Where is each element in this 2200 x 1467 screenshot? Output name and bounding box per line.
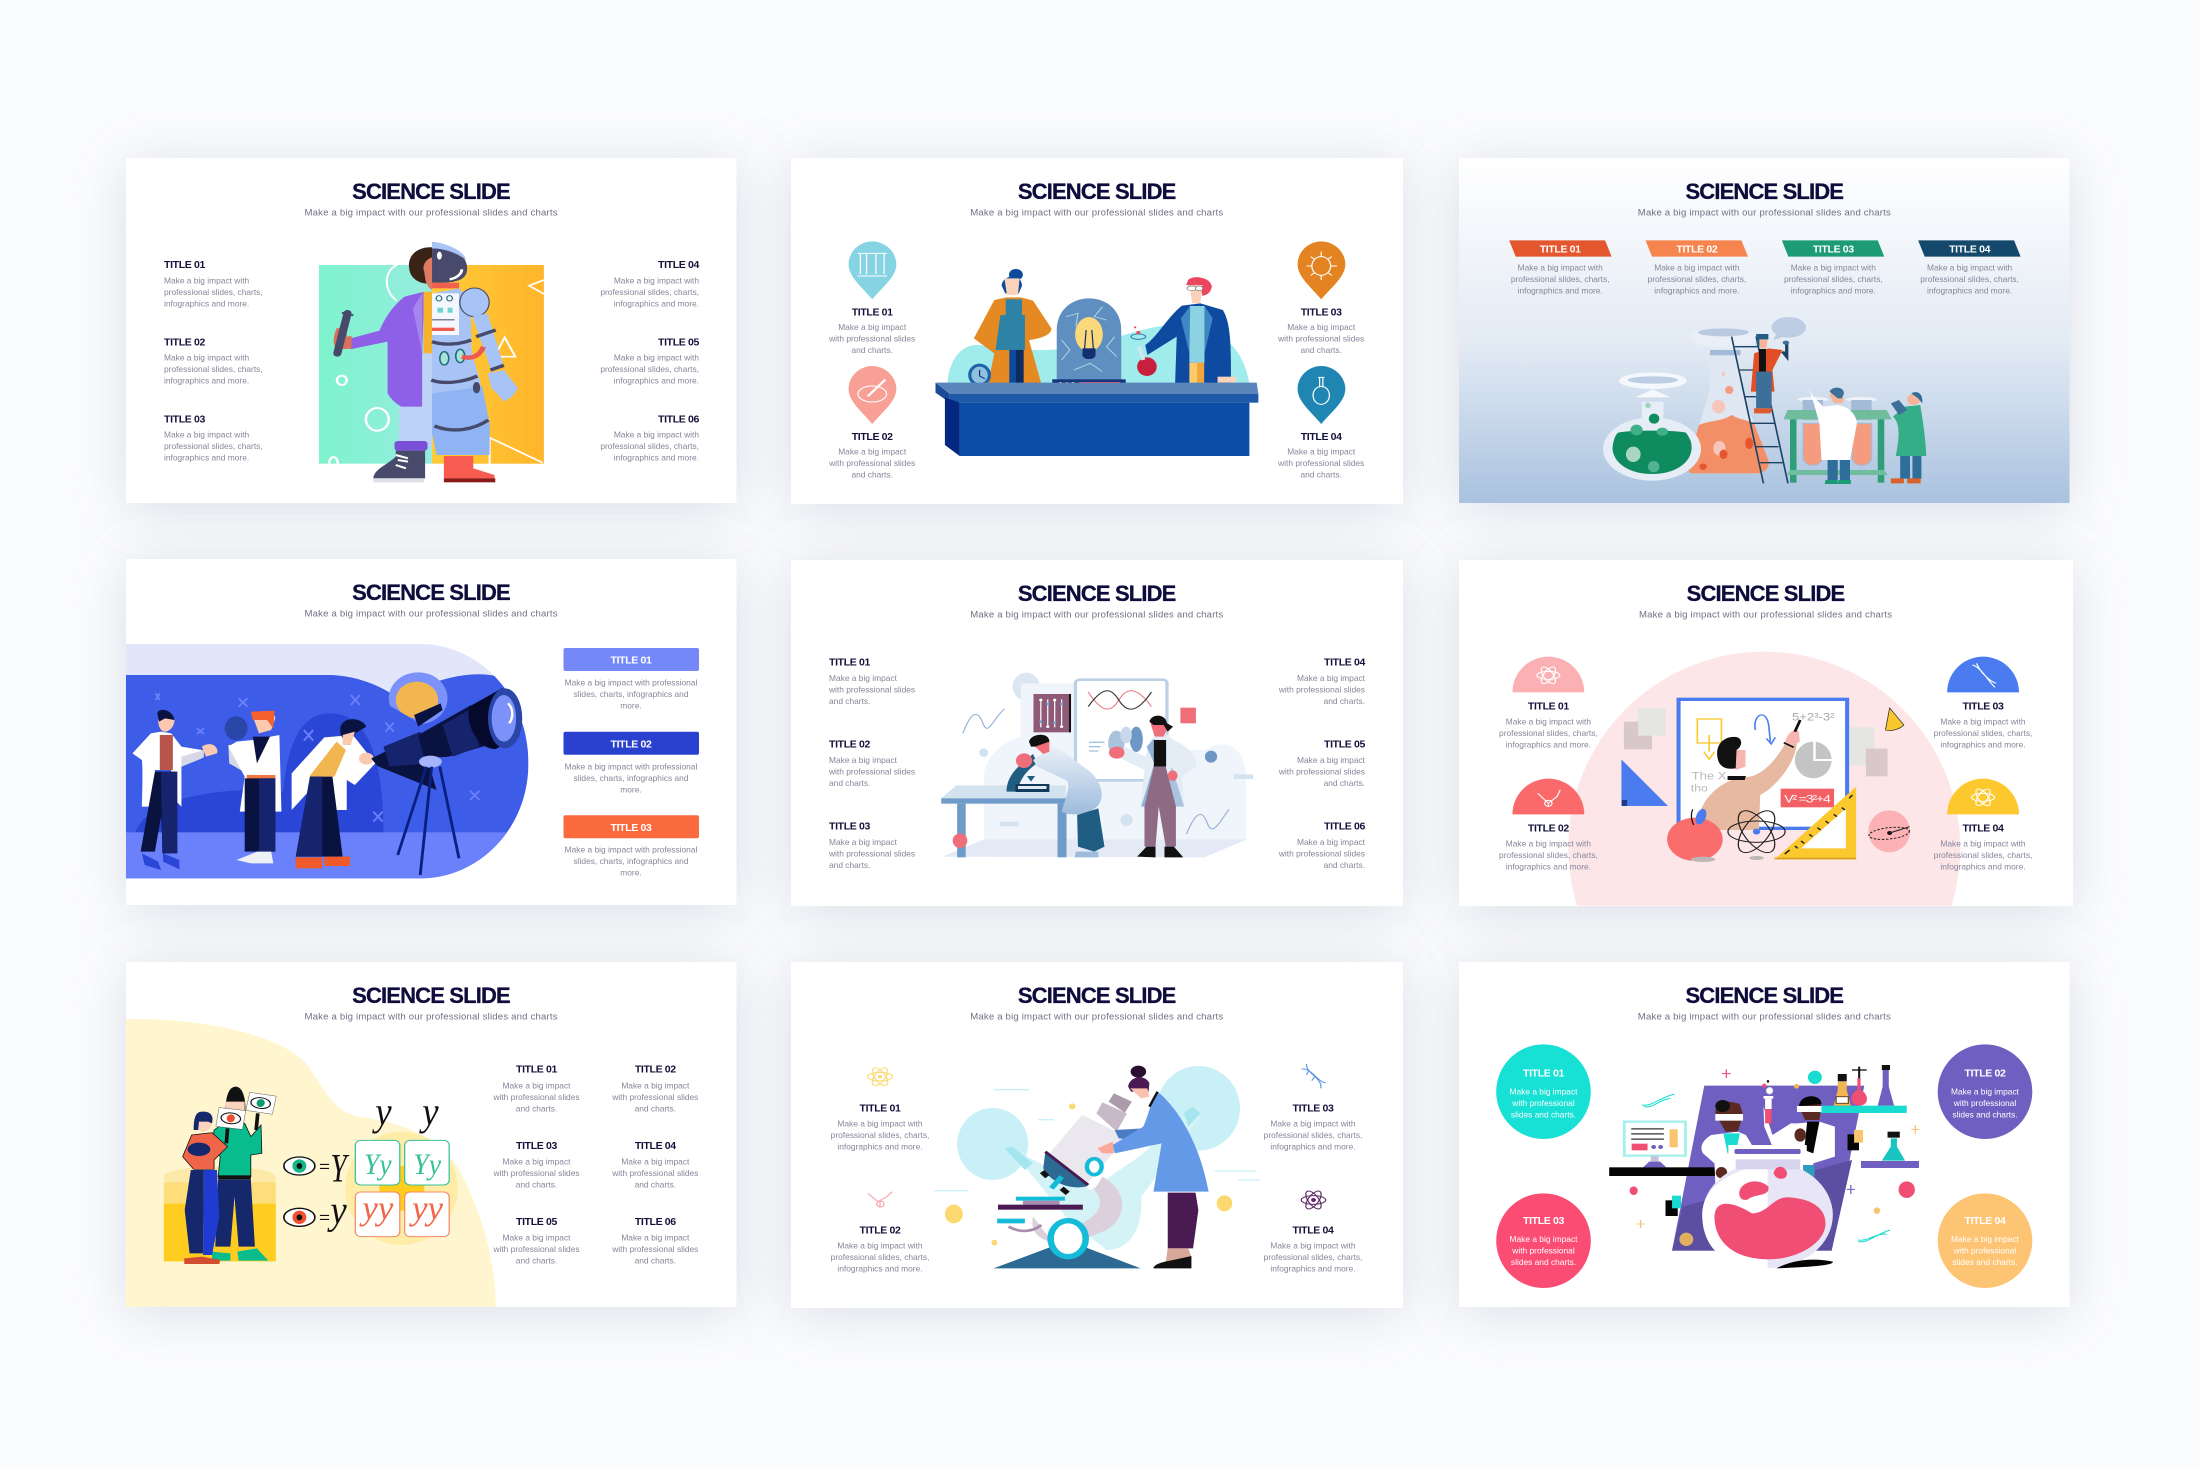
subtitle: Make a big impact with our professional slides and charts [1638,1011,1891,1022]
text block: title 05: Make a big impact [503,1232,571,1242]
text block: title 03 [828,821,915,870]
text block: title 06: professional slides, charts, [600,441,699,451]
text block: title 03: professional slides, charts, [1264,1130,1362,1140]
text block: title 03 [1277,306,1364,355]
text block: title 03: Make a big impact [503,1156,571,1166]
text block: title 03: TITLE 03 [829,821,870,833]
text block: title 02: TITLE 02 [860,1224,901,1236]
title band 03 [564,815,699,838]
title band 02: TITLE 02 [611,738,652,750]
text block: title 05: Make a big impact with [614,352,699,362]
text block: title 01: TITLE 01 [1540,243,1581,255]
text block: title 01: with professional slides [492,1092,580,1102]
illustration: teacher at board [1568,652,1960,906]
text block: title 04: TITLE 04 [1949,243,1991,255]
text block: title 03: and charts. [1300,345,1342,355]
text block: title 05: infographics and more. [614,375,699,385]
text block: title 02: Make a big impact [829,755,898,765]
text block: title 04: Make a big impact [1297,673,1366,683]
panel: telescope slide [126,559,737,905]
illustration: family and punnett square: Y [330,1146,349,1191]
text block: title 04: Make a big impact with [614,275,699,285]
text block: title 03: professional slides, charts, [164,441,263,451]
text block: title 01 [828,657,915,706]
text block: title 03: and charts. [829,860,870,870]
text block: title 03: Make a big impact with [1791,263,1876,273]
text block 02: slides, charts, infographics and [574,773,689,783]
text block: title 06: Make a big impact with [614,430,699,440]
text block: title 06: TITLE 06 [1324,821,1366,833]
text block: title 06 [600,414,700,463]
pin: title 01 [849,241,896,299]
panel: lab desk with pins slide [791,158,1403,504]
text block: title 01 [164,259,263,308]
text block: title 05: TITLE 05 [516,1216,557,1228]
text block: title 03: Make a big impact with [1270,1119,1356,1129]
text block: title 01: TITLE 01 [164,259,205,271]
circle: title 04: Make a big impact [1951,1234,2020,1244]
subtitle: Make a big impact with our professional slides and charts [304,208,558,218]
text block: title 01: infographics and more. [1506,740,1591,750]
illustration: teacher at board: 5+2³-3² [1792,711,1834,723]
icon: dna blue [1302,1064,1326,1088]
slide background [126,962,736,1307]
text block: title 01: professional slides, charts, [1499,728,1598,738]
illustration: scientists and pink flask [1609,1065,1919,1268]
text block: title 03: TITLE 03 [1813,243,1854,255]
icon: atom yellow [868,1066,892,1087]
text block: title 02: TITLE 02 [164,336,205,348]
text block: title 06: TITLE 06 [658,414,700,426]
text block: title 04: infographics and more. [614,298,699,308]
text block: title 02: Make a big impact with [164,352,250,362]
text block: title 02: infographics and more. [1506,861,1591,871]
text block: title 04: professional slides, charts, [1920,274,2019,284]
text block: title 02: TITLE 02 [1676,243,1718,255]
text block: title 06: Make a big impact [1297,837,1366,847]
text block: title 03: Make a big impact [829,837,898,847]
text block: title 02: and charts. [635,1103,676,1113]
text block: title 04: Make a big impact [1287,447,1356,457]
illustration: family and punnett square: = [319,1157,330,1175]
text block: title 03: TITLE 03 [516,1140,557,1152]
text block: title 04: TITLE 04 [658,259,700,271]
text block: title 03: Make a big impact with [164,430,250,440]
slide background [791,962,1403,1308]
text block: title 04: TITLE 04 [1293,1224,1334,1236]
text block: title 06: and charts. [635,1255,676,1265]
text block: title 06: with professional slides [1278,848,1365,858]
panel: astronaut scientist slide [126,158,736,503]
text block: title 03 [492,1140,580,1189]
text block: title 02: with professional slides [611,1092,698,1102]
illustration: scientists at desk with light bulb [936,269,1258,456]
slide background [126,559,736,905]
text block: title 01: Make a big impact [503,1080,571,1090]
text block: title 04: infographics and more. [1940,861,2026,871]
text block: title 02: infographics and more. [1654,286,1740,296]
text block: title 02: TITLE 02 [852,431,893,443]
text block: title 02: professional slides, charts, [1499,850,1598,860]
text block: title 02: infographics and more. [837,1263,923,1273]
text block: title 01 [831,1103,929,1152]
text block: title 05: professional slides, charts, [600,364,699,374]
title: SCIENCE SLIDE [1685,179,1843,204]
text block: title 01: TITLE 01 [852,306,893,318]
panel: giant flasks slide [1459,158,2070,503]
text block: title 03 [1264,1103,1362,1152]
text block: title 03: with professional slides [828,848,915,858]
illustration: family and punnett square: Yy [413,1148,441,1181]
text block: title 04: and charts. [1300,470,1342,480]
text block: title 01: infographics and more. [1518,286,1603,296]
circle: title 04: TITLE 04 [1965,1215,2006,1227]
illustration: family and punnett square: yy [358,1191,394,1227]
text block: title 02: TITLE 02 [1528,823,1569,835]
subtitle: Make a big impact with our professional slides and charts [1639,609,1892,620]
title: SCIENCE SLIDE [352,179,510,204]
text block: title 03: professional slides, charts, [1934,728,2032,738]
text block: title 04: Make a big impact [621,1156,690,1166]
illustration: teacher at board: tho [1691,784,1708,794]
text block: title 04: and charts. [635,1179,676,1189]
text block: title 03: TITLE 03 [1963,701,2004,713]
text block: title 03: infographics and more. [1940,740,2026,750]
illustration: scientists with telescope [126,644,534,880]
text block: title 01: Make a big impact [838,322,907,332]
text block: title 04 [1920,243,2019,296]
text block: title 01: Make a big impact with [837,1119,923,1129]
slide background [791,560,1403,906]
title: SCIENCE SLIDE [1018,983,1176,1008]
subtitle: Make a big impact with our professional slides and charts [1638,208,1891,218]
text block 02: more. [620,784,642,794]
circle: title 03 [1496,1193,1591,1288]
text block: title 01: Make a big impact with [164,275,250,285]
text block: title 06 [611,1216,698,1265]
illustration: teacher at board: The X [1692,769,1726,782]
illustration: half scientist half astronaut [319,242,544,482]
panel: colourful lab slide [1459,962,2070,1307]
text block: title 01: Make a big impact [829,673,898,683]
text block: title 01: and charts. [516,1103,557,1113]
circle: title 01: with professional [1511,1098,1575,1108]
title: SCIENCE SLIDE [352,983,510,1008]
text block: title 04: Make a big impact with [1927,263,2013,273]
text block: title 01 [1511,243,1610,296]
text block: title 05: with professional slides [1278,766,1365,776]
text block: title 03: infographics and more. [1270,1142,1356,1152]
text block: title 04: Make a big impact with [1270,1240,1356,1250]
text block: title 06: infographics and more. [614,453,699,463]
text block: title 01 [828,306,915,355]
text block: title 05: Make a big impact [1297,755,1366,765]
text block: title 03: TITLE 03 [1301,306,1342,318]
circle: title 03: slides and charts. [1511,1257,1576,1267]
subtitle: Make a big impact with our professional slides and charts [304,1011,558,1022]
text block: title 05: and charts. [516,1255,557,1265]
text block: title 04: TITLE 04 [1963,823,2004,835]
text block: title 01: with professional slides [828,334,915,344]
semicircle icon: title 01 [1512,657,1584,692]
text block: title 02: professional slides, charts, [164,364,263,374]
text block: title 01: and charts. [829,696,870,706]
title band 01: TITLE 01 [611,655,652,667]
text block 03: slides, charts, infographics and [574,856,689,866]
text block: title 02: Make a big impact with [1654,263,1740,273]
text block: title 03: infographics and more. [164,453,249,463]
text block: title 04: professional slides, charts, [1934,850,2032,860]
text block: title 02: Make a big impact [621,1080,690,1090]
text block: title 03: Make a big impact with [1940,717,2026,727]
illustration: family and punnett square: y [372,1089,392,1134]
text block: title 04 [1278,657,1366,706]
circle: title 03: with professional [1511,1246,1575,1256]
illustration: family and punnett square [126,1019,496,1307]
text block: title 06: TITLE 06 [635,1216,676,1228]
text block 01 [565,678,697,711]
circle: title 02: with professional [1953,1098,2016,1108]
pin: title 02 [849,366,896,424]
title band 03: TITLE 03 [611,822,652,834]
circle: title 01: slides and charts. [1511,1109,1576,1119]
text block: title 04: with professional slides [611,1168,698,1178]
circle: title 02: slides and charts. [1952,1109,2018,1119]
illustration: family and punnett square: Yy [364,1148,392,1181]
text block: title 01: Make a big impact with [1506,717,1591,727]
panel: blackboard teacher slide [1440,548,2092,930]
text block: title 02 [828,739,915,788]
text block: title 02: and charts. [829,778,870,788]
subtitle: Make a big impact with our professional slides and charts [970,609,1223,620]
infographic canvas [108,146,2092,1332]
circle: title 04: slides and charts. [1952,1257,2018,1267]
title: SCIENCE SLIDE [1685,983,1843,1008]
title: SCIENCE SLIDE [1018,581,1176,606]
circle: title 01: TITLE 01 [1523,1067,1564,1079]
title: SCIENCE SLIDE [352,580,510,605]
title band 01 [564,648,699,671]
circle: title 01 [1496,1044,1591,1139]
text block: title 01: and charts. [851,345,893,355]
text block: title 02: with professional slides [828,766,915,776]
slide background [1459,158,2070,503]
text block: title 02 [1499,823,1598,871]
icon: atom purple [1301,1189,1326,1211]
text block: title 02: professional slides, charts, [831,1252,929,1262]
text block: title 01 [492,1064,580,1113]
text block: title 05: with professional slides [492,1244,580,1254]
text block: title 02: TITLE 02 [635,1064,676,1076]
text block: title 04: professional slides, charts, [600,287,699,297]
text block: title 06: and charts. [1324,860,1365,870]
illustration: scientist and microscope [934,1066,1260,1268]
text block: title 02 [831,1224,929,1273]
text block: title 02: and charts. [851,470,893,480]
panel: genetics slide [126,962,737,1307]
text block: title 02 [1648,243,1746,296]
illustration: family and punnett square: y [327,1188,347,1232]
slide background [1459,962,2070,1307]
text block: title 03 [1934,701,2032,750]
text block: title 04: professional slides, charts, [1264,1252,1362,1262]
text block 03: more. [620,868,642,878]
text block 02 [565,761,697,794]
text block: title 03 [164,414,263,463]
panel: microscope lab slide [791,560,1403,906]
subtitle: Make a big impact with our professional slides and charts [970,1011,1223,1022]
text block: title 05 [600,336,700,385]
text block: title 04 [1934,823,2032,871]
text block 01: Make a big impact with professional [565,678,697,688]
text block: title 02: Make a big impact with [1506,838,1591,848]
text block: title 04 [1264,1224,1362,1273]
text block 03: Make a big impact with professional [565,845,697,855]
pin: title 03 [1298,241,1345,299]
illustration: family and punnett square: = [319,1208,330,1226]
circle: title 02: Make a big impact [1951,1086,2020,1096]
text block: title 02: professional slides, charts, [1648,274,1746,284]
text block: title 01 [1499,701,1598,750]
text block: title 03: professional slides, charts, [1784,274,1883,284]
text block: title 04: TITLE 04 [1324,657,1366,669]
text block: title 05 [492,1216,580,1265]
text block: title 03: Make a big impact [1287,322,1356,332]
text block: title 04 [611,1140,698,1189]
title band 02 [564,732,699,755]
illustration: family and punnett square: yy [408,1191,443,1227]
text block: title 02: infographics and more. [164,375,249,385]
icon: molecule pink [868,1192,892,1207]
illustration: flasks, ladder and scientists [1509,240,2021,484]
panel: giant microscope slide [791,962,1403,1308]
text block: title 01: TITLE 01 [860,1103,901,1115]
text block: title 03: with professional slides [1277,334,1364,344]
text block: title 05 [1278,739,1366,788]
text block: title 05: TITLE 05 [1324,739,1366,751]
text block: title 01: TITLE 01 [516,1064,557,1076]
text block: title 04: Make a big impact with [1940,838,2026,848]
text block: title 04: infographics and more. [1927,286,2012,296]
subtitle: Make a big impact with our professional slides and charts [304,608,558,619]
subtitle: Make a big impact with our professional slides and charts [970,208,1223,218]
semicircle icon: title 03 [1947,657,2019,692]
text block: title 02 [611,1064,698,1113]
slide background [1459,560,2073,906]
text block: title 03: and charts. [516,1179,557,1189]
text block: title 01: TITLE 01 [829,657,870,669]
text block: title 06: with professional slides [611,1244,698,1254]
text block: title 06: Make a big impact [621,1232,690,1242]
text block: title 01: Make a big impact with [1518,263,1603,273]
text block: title 01: infographics and more. [164,298,249,308]
text block 01: slides, charts, infographics and [574,689,689,699]
slide background [126,158,736,503]
text block: title 04: TITLE 04 [635,1140,676,1152]
text block: title 05: TITLE 05 [658,336,700,348]
illustration: family and punnett square: y [419,1089,439,1134]
text block: title 01: professional slides, charts, [831,1130,929,1140]
circle: title 03: Make a big impact [1510,1234,1578,1244]
text block: title 02 [828,431,915,480]
text block: title 04 [1277,431,1364,480]
semicircle icon: title 02 [1512,779,1584,814]
text block: title 02: Make a big impact with [837,1240,923,1250]
text block: title 04: TITLE 04 [1301,431,1342,443]
text block: title 03: infographics and more. [1791,286,1876,296]
text block: title 04: and charts. [1324,696,1365,706]
text block: title 02: with professional slides [828,458,915,468]
title: SCIENCE SLIDE [1018,179,1176,204]
text block: title 04: with professional slides [1278,684,1365,694]
circle: title 04 [1938,1193,2032,1288]
circle: title 02 [1938,1044,2032,1139]
circle: title 03: TITLE 03 [1523,1215,1564,1227]
text block 03 [565,845,697,878]
text block: title 03: TITLE 03 [1293,1103,1334,1115]
text block: title 04: infographics and more. [1270,1263,1356,1273]
circle: title 02: TITLE 02 [1965,1067,2006,1079]
circle: title 01: Make a big impact [1510,1086,1578,1096]
text block 02: Make a big impact with professional [565,761,697,771]
semicircle icon: title 04 [1947,779,2019,814]
text block: title 03: with professional slides [492,1168,580,1178]
text block: title 03: TITLE 03 [164,414,205,426]
title: SCIENCE SLIDE [1687,581,1844,606]
text block: title 06 [1278,821,1366,870]
text block: title 01: with professional slides [828,684,915,694]
text block: title 05: and charts. [1324,778,1365,788]
pin: title 04 [1298,366,1345,424]
text block: title 01: professional slides, charts, [164,287,263,297]
circle: title 04: with professional [1953,1246,2016,1256]
slide background [791,158,1403,504]
text block: title 02 [164,336,263,385]
text block: title 04 [600,259,700,308]
text block: title 01: infographics and more. [837,1142,923,1152]
illustration: two scientists in the lab [941,673,1253,857]
text block: title 01: professional slides, charts, [1511,274,1610,284]
illustration: teacher at board: V² =3²+4 [1784,792,1831,805]
text block: title 03 [1784,243,1883,296]
text block 01: more. [620,701,642,711]
text block: title 02: Make a big impact [838,447,907,457]
text block: title 01: TITLE 01 [1528,701,1569,713]
text block: title 04: with professional slides [1277,458,1364,468]
text block: title 02: TITLE 02 [829,739,870,751]
